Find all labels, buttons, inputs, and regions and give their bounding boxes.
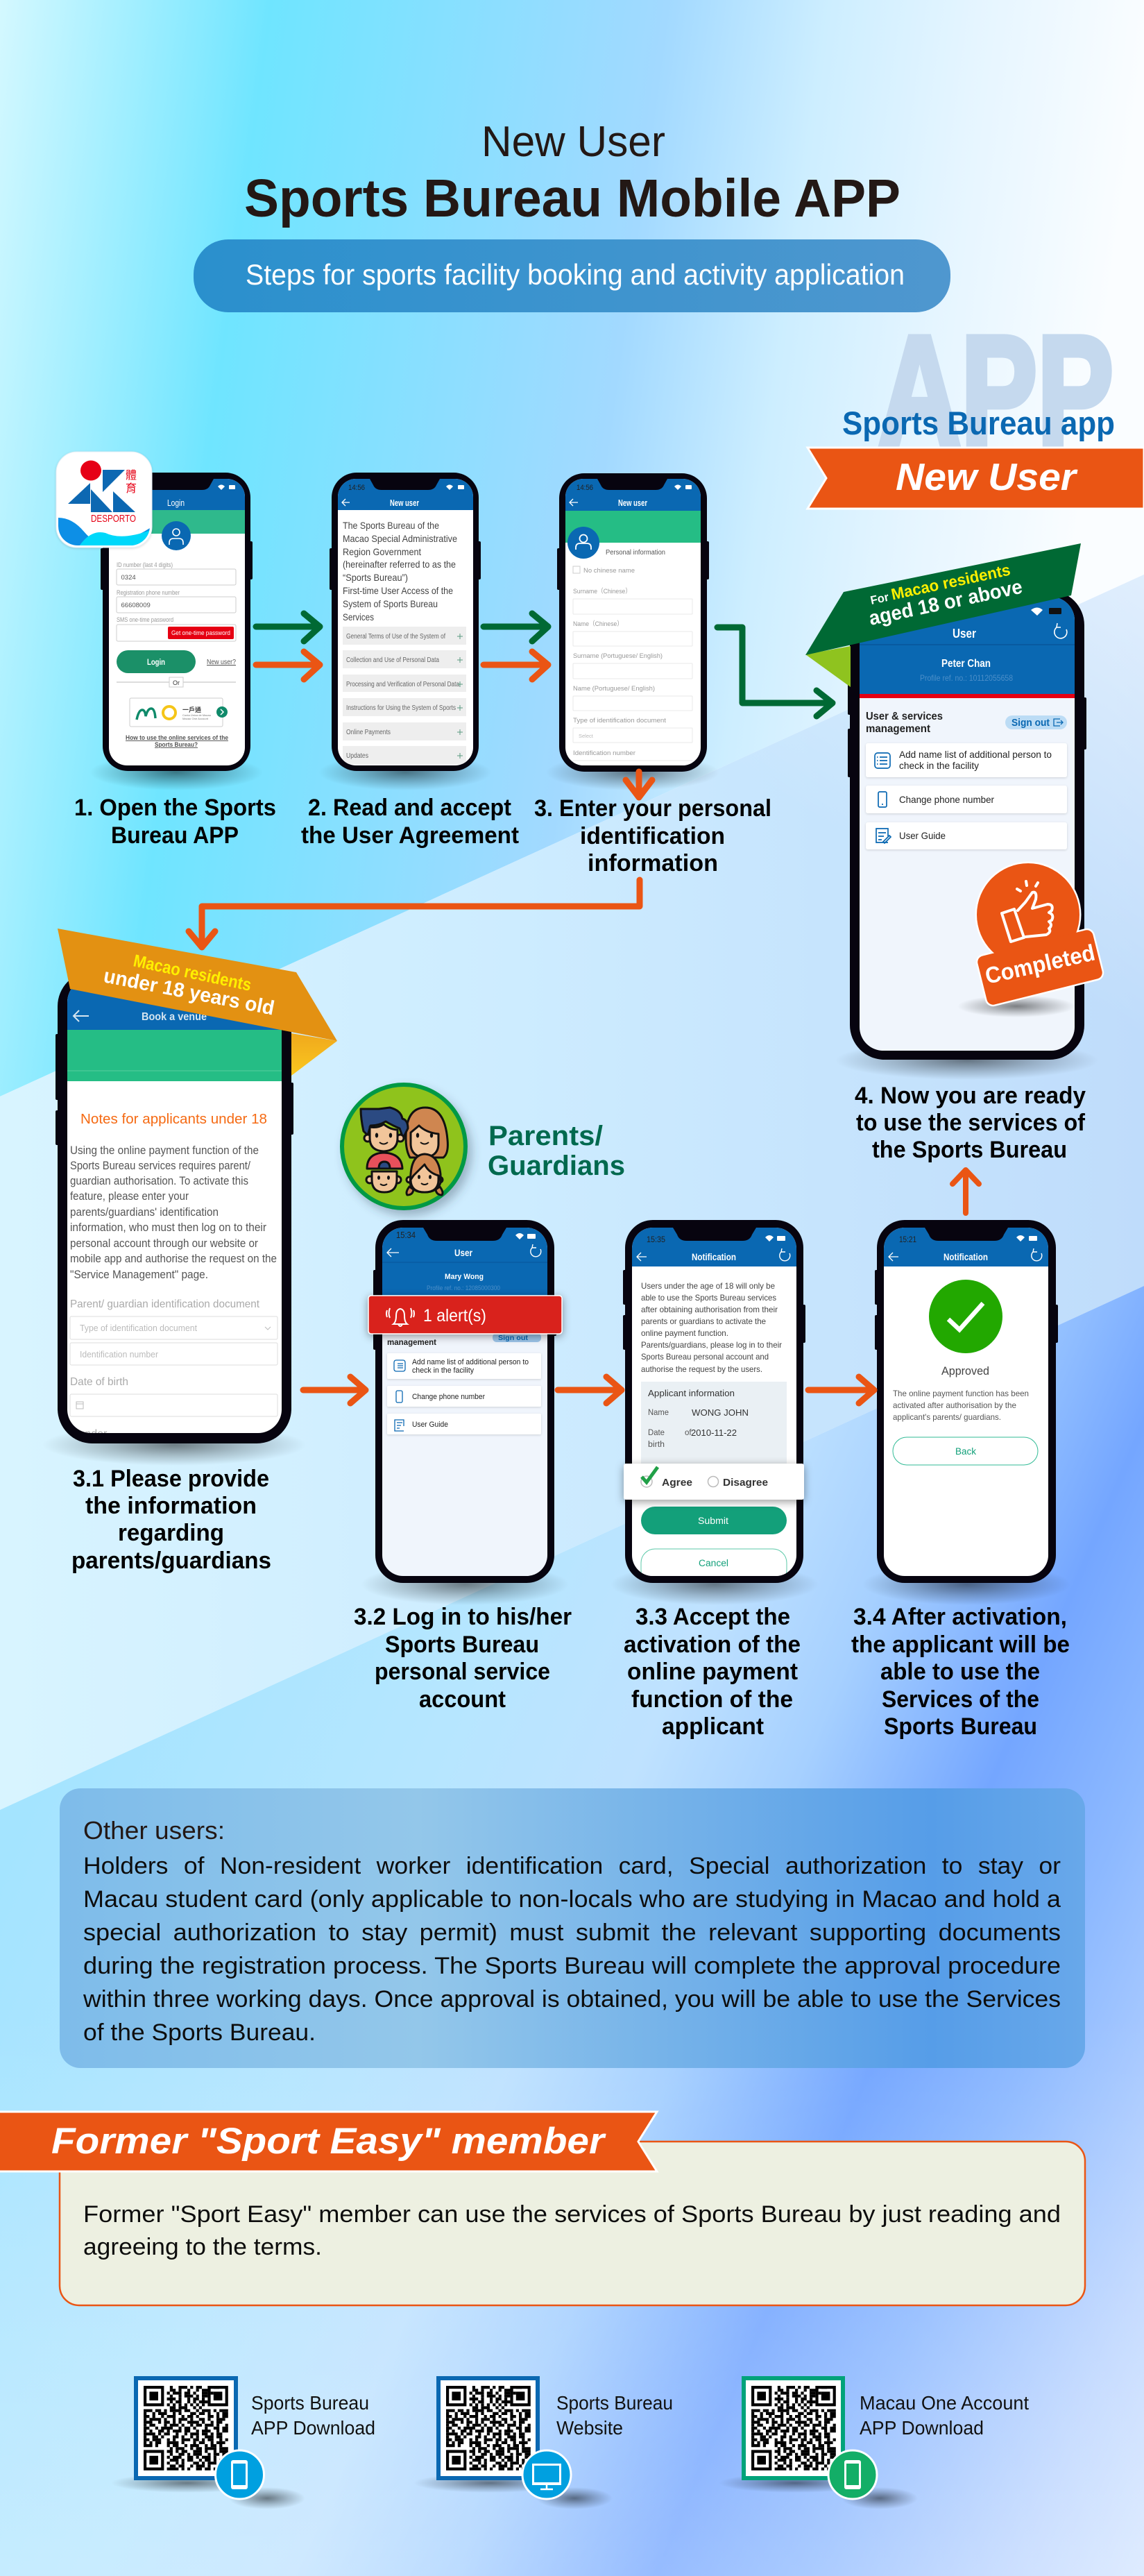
phone 7: accept activation: Sports Bureau personal account and [641, 1352, 769, 1362]
phone 5: notes for applicants under 18: Sports Bureau services requires parent/ [70, 1160, 250, 1172]
banner: Macao residents under 18 years old [58, 929, 337, 1076]
phone 3: personal information screen [557, 473, 709, 775]
body text: former member [83, 2201, 1061, 2260]
phone 5: notes for applicants under 18: "Service Management" page. [70, 1269, 208, 1281]
label: Parents/Guardians [488, 1121, 625, 1181]
step label 3.1: the information [85, 1493, 257, 1519]
panel: other users [60, 1788, 1085, 2068]
phone 7: accept activation: parents or guardians to activate the [641, 1316, 766, 1326]
phone 7: accept activation: 15:35 [647, 1235, 665, 1244]
phone 6: guardian account: Add name list of additional person to [412, 1358, 529, 1366]
step label 3.3 [624, 1604, 801, 1740]
phone 5: notes for applicants under 18: Notes for applicants under 18 [80, 1112, 267, 1127]
phone 8: approved: Back [955, 1446, 976, 1457]
label: Parents/Guardians: Parents/ [488, 1121, 603, 1151]
step label 3: identification [580, 823, 725, 849]
phone 7: accept activation: Name [648, 1409, 669, 1417]
phone 8: approved: applicant's parents/ guardians. [893, 1412, 1001, 1422]
phone 5: notes for applicants under 18: feature, please enter your [70, 1190, 189, 1203]
phone 1: login screen: New user? [207, 658, 236, 666]
phone 3: personal information screen: Select [579, 733, 594, 739]
step label 1 [74, 795, 276, 849]
phone 7: accept activation: Applicant information [648, 1388, 735, 1398]
phone 4: user and services management: management [866, 723, 931, 735]
phone 4: user and services management [848, 591, 1086, 1060]
step label 3.4: Sports Bureau [884, 1713, 1037, 1740]
phone 7: accept activation: Cancel [699, 1558, 728, 1568]
ribbon: New User [808, 448, 1144, 509]
phone 1: login screen: Sports Bureau? [155, 741, 198, 749]
phone 4: user and services management: User & services [866, 711, 943, 722]
phone 6: guardian account: Change phone number [412, 1393, 485, 1401]
icon: DESPORTO app icon: 體 [126, 469, 137, 482]
body text: other users: Holders of Non-resident worker identification card, Special authorization to stay or [83, 1853, 1061, 1879]
phone 6: guardian account [373, 1220, 556, 1583]
badge: completed: Completed [982, 940, 1098, 989]
label: Parents/Guardians: Guardians [488, 1151, 625, 1181]
phone 2: user agreement screen: Collection and Use of Personal Data [346, 656, 439, 664]
phone 1: login screen: Registration phone number [117, 589, 180, 597]
title: New User: New User [481, 118, 665, 166]
phone 6: guardian account: User [454, 1247, 472, 1258]
phone 7: accept activation: Notification [692, 1251, 736, 1262]
phone 3: personal information screen: New user [618, 498, 647, 508]
background: upper panel [0, 0, 1144, 1096]
phone 2: user agreement screen: First-time User Access of the [343, 585, 453, 596]
step label 3: information [588, 850, 718, 876]
phone 5: notes for applicants under 18: mobile app and authorise the request on the [70, 1253, 277, 1265]
phone 5: notes for applicants under 18 [56, 972, 293, 1443]
phone 1: login screen: Or [173, 679, 180, 686]
phone 1: login screen: 66608009 [121, 602, 151, 609]
phone 7: accept activation: authorise the request by the users. [641, 1364, 762, 1374]
phone 2: user agreement screen: 14:56 [348, 484, 365, 492]
phone 5: notes for applicants under 18: personal account through our website or [70, 1237, 258, 1250]
phone 7: accept activation: online payment function. [641, 1328, 728, 1338]
phone 3: personal information screen: Surname（Chinese） [573, 587, 631, 595]
step label 3.1: 3.1 Please provide [73, 1466, 269, 1492]
banner: Macao residents under 18 years old: Macao residents [132, 951, 253, 995]
phone 2: user agreement screen: “Sports Bureau”) [343, 572, 408, 583]
body text: other users: within three working days. Once approval is obtained, you will be able to use the Services [83, 1986, 1061, 2012]
phone 2: user agreement screen: Instructions for Using the System of Sports [346, 704, 456, 712]
step label 3.4: the applicant will be [851, 1632, 1070, 1658]
phone 7: accept activation: birth [648, 1441, 665, 1449]
icon: DESPORTO app icon [56, 452, 154, 548]
phone 1: login screen: How to use the online services of the [126, 734, 228, 742]
phone 5: notes for applicants under 18: Date of birth [70, 1376, 128, 1388]
phone 3: personal information screen: Name (Portuguese/ English) [573, 685, 655, 693]
body text: other users: special authorization to stay permit) must submit the relevant supporting documents [83, 1920, 1061, 1946]
phone 6: guardian account: Mary Wong [445, 1273, 484, 1281]
phone 3: personal information screen: Personal information [606, 549, 665, 557]
step label 3.3: online payment [627, 1659, 798, 1685]
phone 1: login screen: Macao One Account [182, 718, 209, 720]
QR code: Macau One Account APP download: Macau One Account [860, 2392, 1029, 2414]
phone 2: user agreement screen: Macao Special Administrative [343, 533, 457, 544]
icon: family [342, 1085, 466, 1208]
step label 3.4: 3.4 After activation, [853, 1604, 1067, 1630]
title: Sports Bureau Mobile APP: Sports Bureau Mobile APP [244, 169, 900, 228]
phone 6: guardian account: 15:34 [396, 1230, 416, 1240]
step label 3.1: parents/guardians [71, 1548, 271, 1574]
banner: For Macao residents aged 18 or above: For Macao residents [869, 561, 1012, 608]
step label 1: 1. Open the Sports [74, 795, 276, 821]
phone 7: accept activation [623, 1220, 805, 1584]
phone 2: user agreement screen: Updates [346, 752, 368, 760]
arrows: step 2 to step 3 [484, 613, 548, 679]
phone 1: login screen: ID number (last 4 digits) [117, 561, 173, 569]
panel: former Sport Easy member [60, 2142, 1085, 2305]
icon: DESPORTO app icon: 育 [126, 482, 137, 495]
banner: Macao residents under 18 years old: under 18 years old [102, 965, 276, 1020]
ribbon: former Sport Easy member: Former "Sport Easy" member [51, 2121, 607, 2162]
phone 7: accept activation: able to use the Sports Bureau services [641, 1293, 776, 1303]
phone 6: guardian account: Sign out [498, 1334, 529, 1342]
step label 1: Bureau APP [111, 822, 239, 849]
arrow: orange down from step 3 [626, 772, 652, 797]
phone 4: user and services management: Peter Chan [941, 658, 991, 670]
phone 1: login screen: 一戶通 [182, 706, 201, 713]
ribbon: New User: New User [896, 455, 1078, 498]
phone 3: personal information screen: Identification number [573, 749, 635, 757]
phone 2: user agreement screen: (hereinafter referred to as the [343, 559, 456, 570]
body text: other users [83, 1853, 1061, 2046]
arrow: orange elbow to step 3.1 [189, 880, 640, 947]
body text: former member: Former "Sport Easy" member can use the services of Sports Bureau by just reading and [83, 2201, 1061, 2228]
phone 5: notes for applicants under 18: parents/guardians' identification [70, 1206, 219, 1219]
QR code: Sports Bureau APP download: Sports Bureau [251, 2392, 369, 2414]
phone 5: notes for applicants under 18: Type of identification document [80, 1323, 198, 1333]
step label 3.4: able to use the [880, 1659, 1040, 1685]
QR code: Sports Bureau website: Website [556, 2417, 623, 2439]
phone 3: personal information screen: Name（Chinese） [573, 620, 623, 628]
phone 6: guardian account: check in the facility [412, 1366, 474, 1375]
phone 1: login screen: Get one-time password [171, 629, 230, 637]
phone 7: accept activation: WONG JOHN [692, 1407, 749, 1418]
phone 6: guardian account: Profile ref. no.: 12085000300 [427, 1285, 500, 1291]
phone 1: login screen: Login [147, 657, 165, 667]
phone 1: login screen [101, 473, 253, 771]
body text: other users: during the registration process. The Sports Bureau will complete the approval procedure [83, 1953, 1061, 1979]
phone 2: user agreement screen: Region Government [343, 546, 421, 557]
badge: completed [957, 863, 1104, 1017]
phone shadows [42, 754, 1099, 1605]
background: middle panel [0, 575, 1144, 1810]
phone 6: guardian account: User Guide [412, 1421, 448, 1429]
phone 1: login screen: Conta Única de Macau [182, 713, 211, 717]
phone 2: user agreement screen: New user [390, 498, 419, 508]
phone 8: approved: activated after authorisation by the [893, 1400, 1016, 1410]
step label 3 [534, 795, 771, 876]
phone 5: notes for applicants under 18: guardian authorisation. To activate this [70, 1175, 248, 1187]
phone 2: user agreement screen: Processing and Verification of Personal Data [346, 681, 459, 688]
phone 2: user agreement screen [330, 473, 481, 771]
arrows: step 1 to step 2 [256, 613, 320, 679]
step label 3.2: 3.2 Log in to his/her [354, 1604, 572, 1630]
step label 4: to use the services of [856, 1110, 1086, 1136]
phone 7: accept activation: after obtaining authorisation from their [641, 1305, 778, 1314]
step label 3.4 [851, 1604, 1070, 1740]
step label 3.3: activation of the [624, 1632, 801, 1658]
QR code: Sports Bureau APP download: APP Download [251, 2417, 375, 2439]
QR code: Macau One Account APP download [719, 2376, 1029, 2509]
QR code: Sports Bureau APP download [111, 2376, 375, 2509]
step label 3.2: Sports Bureau [385, 1632, 539, 1658]
step label 3.1 [71, 1466, 271, 1574]
body text: other users: Macau student card (only applicable to non-locals who are studying in Macao and hold a [83, 1886, 1061, 1913]
step label 4 [855, 1083, 1086, 1163]
phone 4: user and services management: Sign out [1011, 717, 1050, 729]
phone 5: notes for applicants under 18: Parent/ guardian identification document [70, 1298, 260, 1310]
phone 4: user and services management: User [953, 627, 976, 641]
phone 3: personal information screen: Type of identification document [573, 717, 666, 724]
phone 8: approved: 15:21 [899, 1235, 916, 1244]
body text: former member: agreeing to the terms. [83, 2234, 322, 2260]
phone 5: notes for applicants under 18: Identification number [80, 1350, 158, 1359]
phone 5: notes for applicants under 18: Gender [70, 1428, 108, 1440]
phone 4: user and services management: Change phone number [899, 794, 994, 805]
icon: DESPORTO app icon: DESPORTO [91, 513, 136, 525]
phone 4: user and services management: Add name list of additional person to [899, 749, 1052, 760]
step label 3.3: applicant [662, 1713, 764, 1740]
alert bar [368, 1296, 562, 1334]
arrow: green elbow to step 4 [717, 627, 833, 716]
step label 3.3: function of the [631, 1686, 793, 1713]
phone 8: approved: Notification [944, 1251, 988, 1262]
phone 2: user agreement screen: System of Sports Bureau [343, 598, 438, 609]
step label 3.1: regarding [118, 1520, 224, 1546]
phone 1: login screen: Login [167, 498, 185, 508]
step label 4: the Sports Bureau [872, 1137, 1067, 1163]
phone 8: approved: The online payment function has been [893, 1389, 1029, 1398]
phone 3: personal information screen: No chinese name [583, 567, 635, 575]
QR code: Macau One Account APP download: APP Download [860, 2417, 984, 2439]
step label 3.2 [354, 1604, 572, 1713]
phone 4: user and services management: Profile ref. no.: 10112055658 [920, 673, 1013, 683]
banner: For Macao residents aged 18 or above: aged 18 or above [867, 576, 1025, 630]
phone 3: personal information screen: Surname (Portuguese/ English) [573, 652, 663, 660]
agree or disagree bar [624, 1464, 804, 1500]
phone 5: notes for applicants under 18: Book a venue [142, 1011, 207, 1023]
phone 2: user agreement screen: The Sports Bureau of the [343, 520, 439, 531]
banner: For Macao residents aged 18 or above [805, 543, 1081, 687]
body text: other users: of the Sports Bureau. [83, 2019, 316, 2046]
agree or disagree bar: Disagree [723, 1477, 768, 1489]
phone 5: notes for applicants under 18: Using the online payment function of the [70, 1144, 259, 1157]
phone 8: approved [875, 1220, 1058, 1583]
step label 2: the User Agreement [301, 822, 519, 849]
step label 3.2: account [419, 1686, 506, 1713]
step label 4: 4. Now you are ready [855, 1083, 1086, 1109]
arrow: up to step 4 [953, 1170, 979, 1213]
phone 7: accept activation: Users under the age of 18 will only be [641, 1281, 775, 1291]
heading: other users: Other users: [83, 1816, 225, 1845]
phone 3: personal information screen: 14:56 [577, 484, 593, 492]
phone 2: user agreement screen: Services [343, 611, 374, 622]
phone 7: accept activation: of [685, 1429, 692, 1437]
step label 2: 2. Read and accept [308, 795, 511, 821]
agree or disagree bar: Agree [662, 1477, 692, 1489]
QR code: Sports Bureau website: Sports Bureau [556, 2392, 673, 2414]
phone 1: login screen: 0324 [121, 574, 136, 582]
step label 3.2: personal service [375, 1659, 550, 1685]
phone 8: approved: Approved [941, 1364, 989, 1378]
step label 3.3: 3.3 Accept the [635, 1604, 790, 1630]
phone 5: notes for applicants under 18: information, who must then log on to their [70, 1221, 266, 1234]
phone 4: user and services management: User Guide [899, 830, 946, 841]
phone 7: accept activation: Date [648, 1429, 665, 1437]
step label 3.4: Services of the [882, 1686, 1039, 1713]
label: Sports Bureau app: Sports Bureau app [842, 405, 1115, 441]
subtitle pill [194, 239, 950, 312]
phone 7: accept activation: Parents/guardians, please log in to their [641, 1340, 782, 1350]
phone 2: user agreement screen: General Terms of Use of the System of [346, 633, 445, 641]
arrows: between phones 3.1 to 3.4 [303, 1377, 874, 1403]
QR code: Sports Bureau website [413, 2376, 673, 2509]
subtitle pill: Steps for sports facility booking and activity application [246, 258, 905, 291]
alert bar: 1 alert(s) [423, 1306, 486, 1325]
step label 2 [301, 795, 519, 849]
phone 6: guardian account: management [387, 1339, 436, 1347]
ribbon: former Sport Easy member [0, 2112, 657, 2171]
phone 7: accept activation: 2010-11-22 [691, 1427, 737, 1438]
background: lower panel [0, 1286, 1144, 2576]
phone 7: accept activation: Submit [698, 1516, 728, 1526]
phone 1: login screen: SMS one-time password [117, 616, 173, 624]
phone 4: user and services management: check in the facility [899, 760, 979, 771]
phone 2: user agreement screen: Online Payments [346, 729, 391, 736]
step label 3: 3. Enter your personal [534, 795, 771, 822]
